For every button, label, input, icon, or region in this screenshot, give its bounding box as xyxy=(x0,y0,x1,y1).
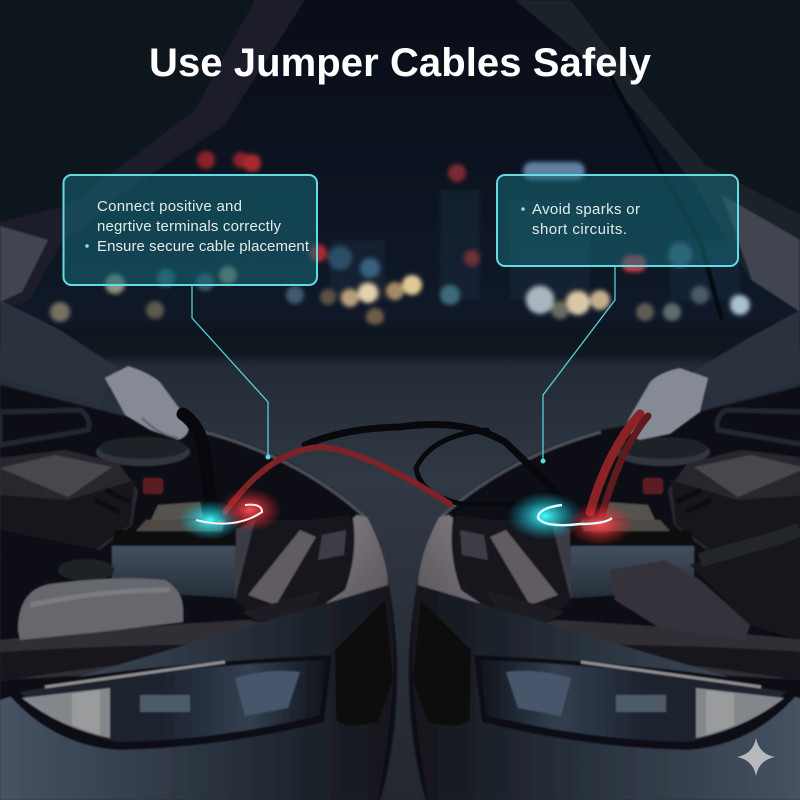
open hood left xyxy=(0,0,305,310)
connector line left xyxy=(192,285,270,460)
black cable xyxy=(305,425,575,512)
callout: connect terminals: Connect positive and xyxy=(97,198,242,215)
jumper cables xyxy=(183,414,648,518)
title: Use Jumper Cables Safely xyxy=(149,41,652,85)
callout: connect terminals: Ensure secure cable placement xyxy=(97,238,310,255)
air box cover xyxy=(610,560,750,640)
horizon band xyxy=(0,325,800,358)
coolant tank xyxy=(18,559,183,640)
intake hoses xyxy=(690,525,800,640)
city bokeh lights xyxy=(50,151,750,326)
connector line right xyxy=(540,266,615,464)
callout: avoid sparks: short circuits. xyxy=(532,221,627,238)
callout: avoid sparks xyxy=(497,175,738,266)
black cable loop xyxy=(416,430,545,504)
icon: sparkle xyxy=(737,738,775,776)
car right xyxy=(409,385,800,800)
open hood right xyxy=(515,0,800,320)
car left xyxy=(0,385,397,800)
callout: connect terminals xyxy=(64,175,317,285)
left black clamp lead xyxy=(183,414,212,518)
red cable xyxy=(225,447,450,512)
right red clamp lead xyxy=(590,414,640,512)
callout: avoid sparks: Avoid sparks or xyxy=(532,201,640,218)
callout: connect terminals: negrtive terminals correctly xyxy=(97,218,282,235)
right arm and glove xyxy=(628,310,800,440)
terminal glow left xyxy=(178,488,282,540)
left arm and glove xyxy=(0,300,189,440)
terminal glow right xyxy=(507,492,634,546)
